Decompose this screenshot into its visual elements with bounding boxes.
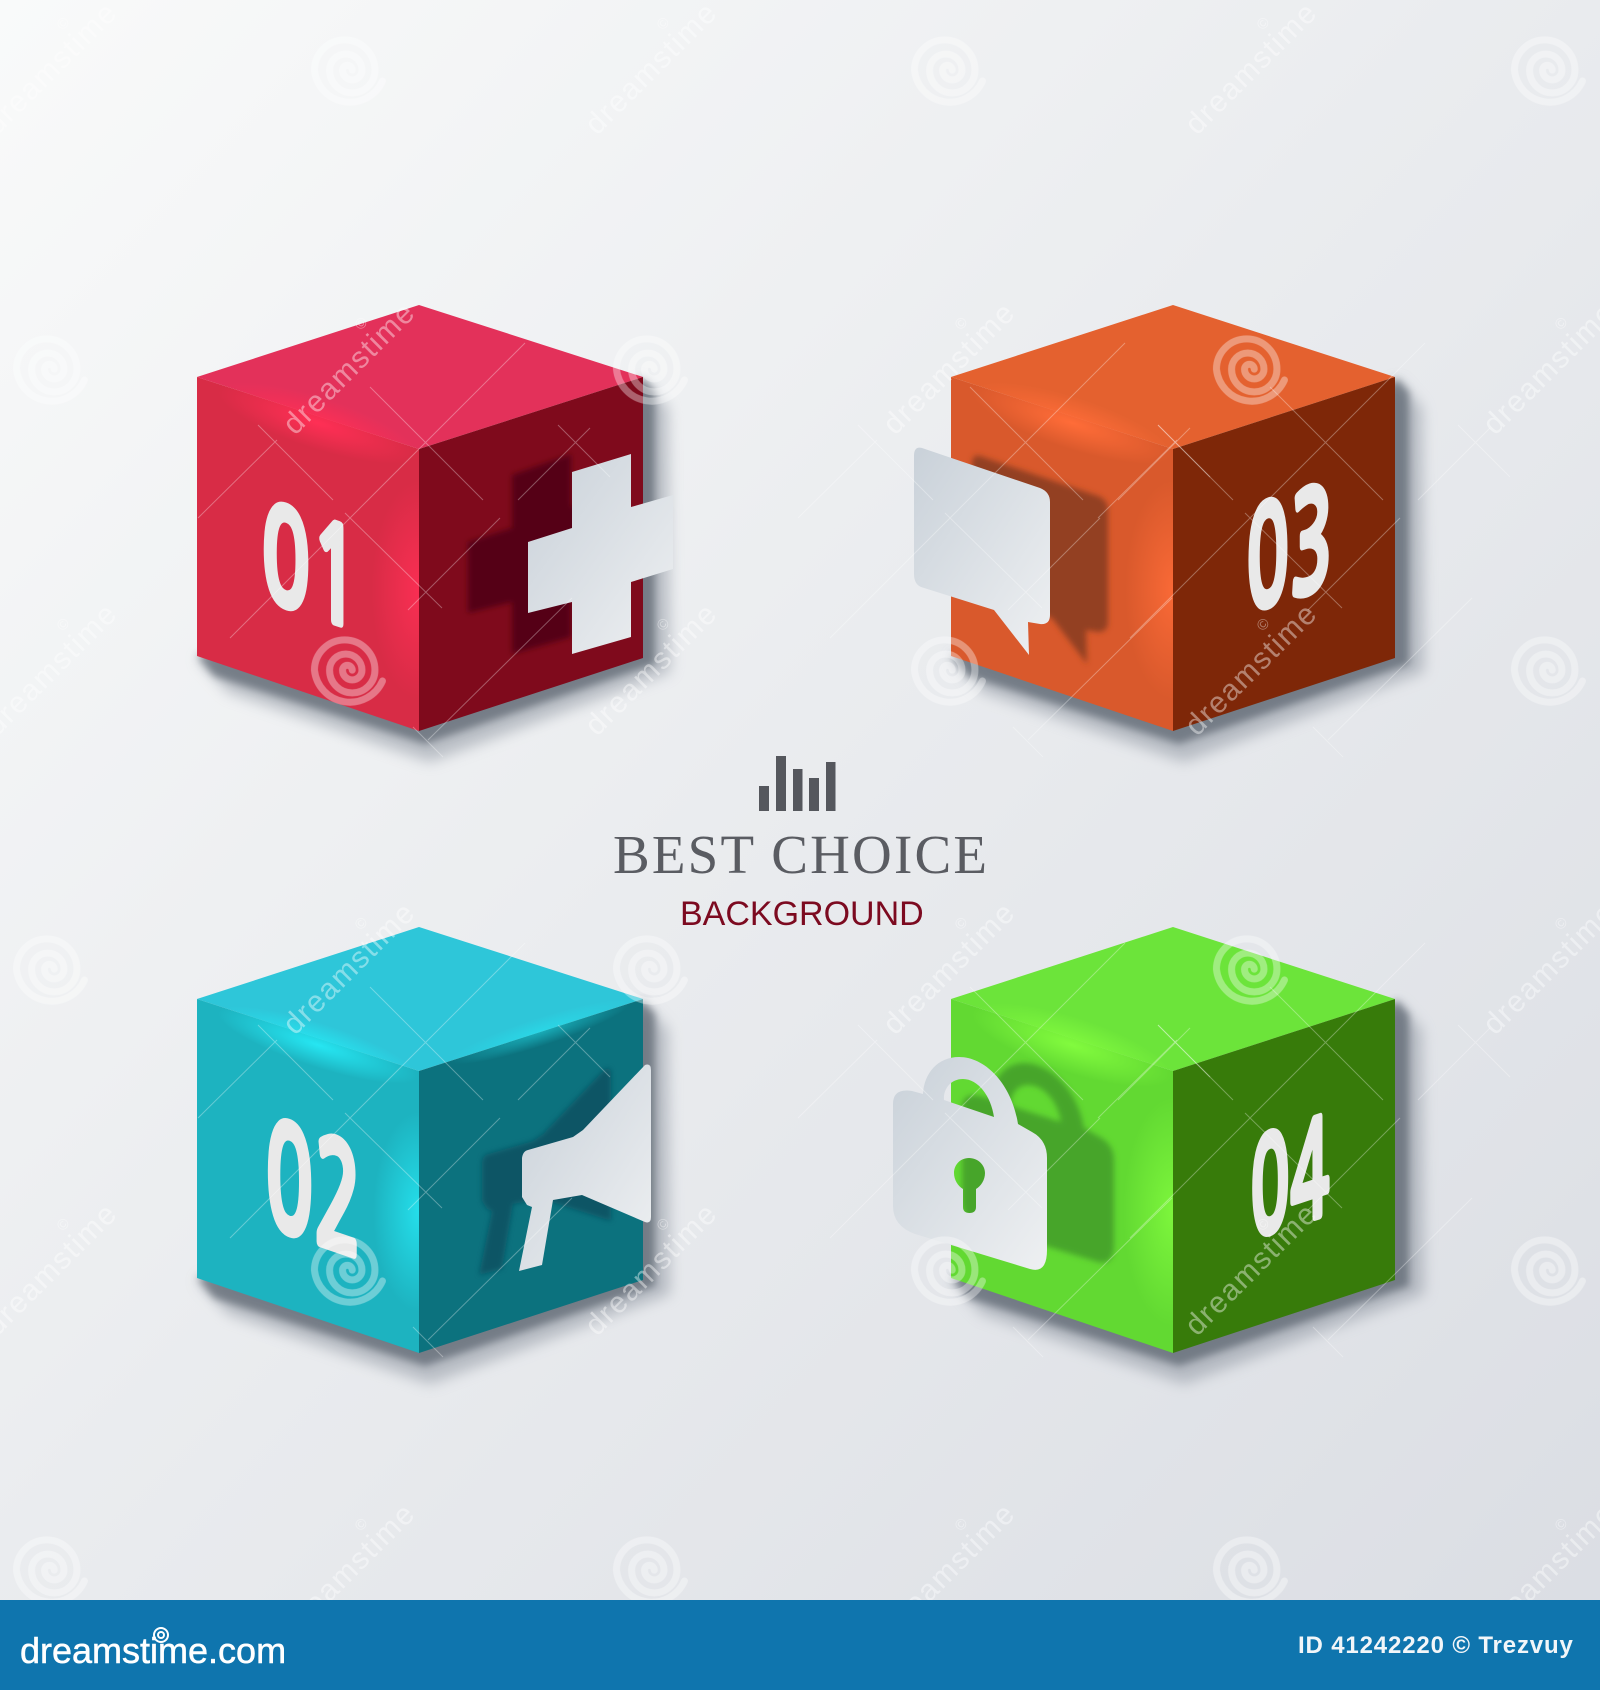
icon shadow: plus — [466, 453, 574, 655]
watermark: dreamstime text: dreamstime — [877, 896, 1022, 1041]
image id: ID 41242220 © Trezvuy — [1298, 1632, 1574, 1659]
watermark: dreamstime text: © — [53, 615, 73, 635]
footer logo text: dreamstime.com — [20, 1630, 286, 1671]
watermark: dreamstime text: © — [53, 1215, 73, 1235]
watermark: dreamstime text: © — [653, 615, 673, 635]
subheading: BACKGROUND — [680, 895, 924, 933]
watermark: dreamstime text: © — [1551, 914, 1571, 934]
number 03: 03 — [1246, 468, 1333, 634]
icon: speech bubble — [914, 448, 1050, 655]
footer logo spiral — [154, 1628, 168, 1642]
number 04: 04 — [1250, 1101, 1330, 1259]
watermark: dreamstime text: dreamstime — [877, 1497, 1022, 1642]
cube 03: orange — [951, 305, 1424, 762]
number 01: 01 — [261, 487, 360, 651]
watermark: dreamstime text: dreamstime — [1179, 1197, 1324, 1342]
watermark: dreamstime text: © — [351, 914, 371, 934]
watermark: dreamstime text: dreamstime — [277, 296, 422, 441]
watermark: dreamstime text: dreamstime — [579, 1197, 724, 1342]
icon: plus — [528, 454, 673, 654]
center logo: bar chart icon — [759, 756, 836, 811]
watermark: dreamstime text: dreamstime — [277, 1497, 422, 1642]
watermark: dreamstime text: dreamstime — [579, 597, 724, 742]
watermark: dreamstime text: dreamstime — [277, 896, 422, 1041]
watermark: dreamstime text: © — [1551, 1515, 1571, 1535]
icon shadow: padlock — [962, 1063, 1114, 1263]
watermark: dreamstime text: © — [653, 14, 673, 34]
number 02: 02 — [265, 1103, 362, 1280]
watermark: dreamstime text: © — [951, 1515, 971, 1535]
watermark: dreamstime text: © — [351, 1515, 371, 1535]
watermark: dreamstime text: © — [1551, 314, 1571, 334]
icon shadow: megaphone — [479, 1068, 611, 1275]
cube 04: green — [951, 927, 1424, 1384]
icon shadow: speech bubble — [972, 456, 1108, 664]
watermark: dreamstime text: © — [351, 314, 371, 334]
watermark: crossing lines — [198, 343, 1510, 1357]
watermark: dreamstime text: © — [951, 914, 971, 934]
watermark: dreamstime text: © — [951, 314, 971, 334]
footer banner — [0, 1600, 1600, 1690]
watermark: dreamstime text: © — [53, 14, 73, 34]
watermark: dreamstime text: © — [1253, 615, 1273, 635]
watermark: dreamstime text: dreamstime — [877, 296, 1022, 441]
watermark: dreamstime text: © — [653, 1215, 673, 1235]
heading: BEST CHOICE — [613, 824, 989, 885]
icon: megaphone — [519, 1065, 651, 1271]
watermark: dreamstime text: dreamstime — [1179, 597, 1324, 742]
cube 01: red — [197, 305, 670, 762]
cube 02: teal — [197, 927, 670, 1384]
icon: padlock — [893, 1057, 1047, 1270]
watermark: dreamstime text: © — [1253, 14, 1273, 34]
watermark: dreamstime text: © — [1253, 1215, 1273, 1235]
